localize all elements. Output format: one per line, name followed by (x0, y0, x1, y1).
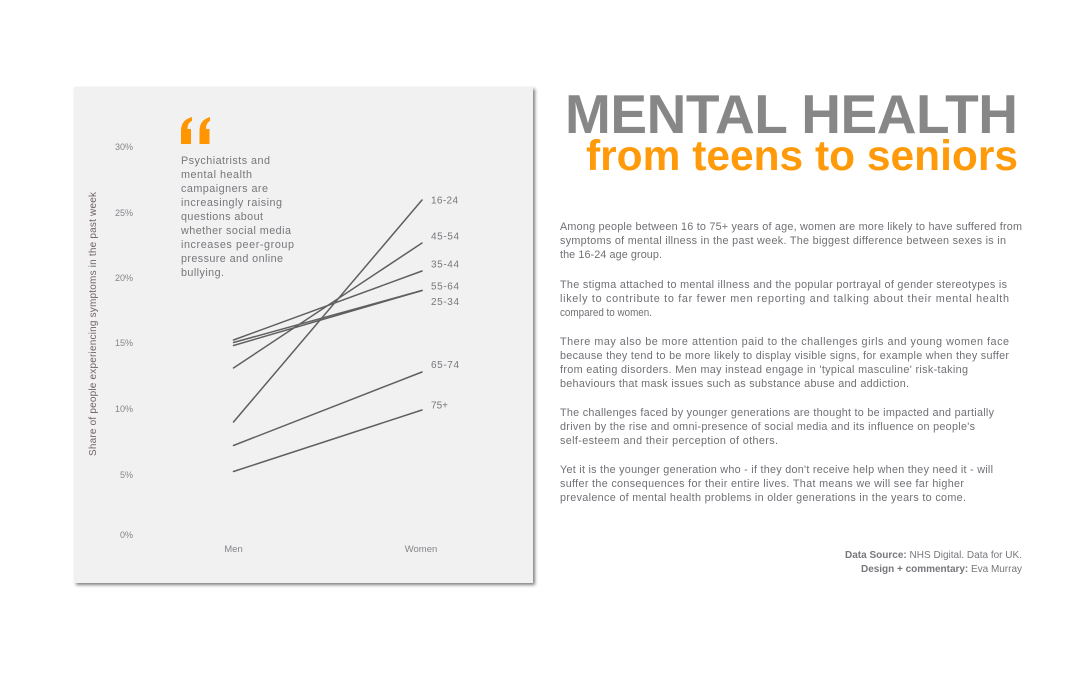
slope chart lines (234, 200, 422, 472)
quote text (180, 155, 294, 279)
y-axis title: Share of people experiencing symptoms in the past week (88, 191, 99, 456)
paragraph 3: from eating disorders. Men may instead engage in 'typical masculine' risk-taking (560, 364, 968, 376)
y-axis labels: 20% (115, 273, 133, 283)
paragraph 3: because they tend to be more likely to display visible signs, for example when they suffer (560, 350, 1009, 362)
y-axis labels: 5% (120, 470, 133, 480)
paragraph 3: behaviours that mask issues such as substance abuse and addiction. (560, 378, 909, 390)
quote text: questions about (181, 211, 263, 223)
age group labels: 45-54 (431, 232, 459, 242)
quote text: pressure and online (181, 253, 283, 265)
y-axis labels: 10% (115, 404, 133, 414)
paragraph 2: compared to women. (560, 307, 652, 319)
paragraph 2: likely to contribute to far fewer men reporting and talking about their mental health (560, 293, 1009, 305)
line: 16-24 (234, 200, 422, 422)
y-axis labels: 25% (115, 208, 133, 218)
age group labels: 25-34 (431, 297, 459, 308)
age group labels: 55-64 (431, 282, 459, 292)
paragraph 1: Among people between 16 to 75+ years of age, women are more likely to have suffered from (560, 221, 1022, 233)
x-axis labels (224, 544, 437, 555)
quote text: bullying. (181, 267, 224, 279)
paragraph 1: the 16-24 age group. (560, 249, 662, 261)
credits (845, 550, 1022, 575)
paragraph 4 (560, 407, 995, 447)
x-axis labels: Men (224, 544, 243, 555)
line: 45-54 (234, 243, 422, 368)
paragraph 4: driven by the rise and omni-presence of social media and its influence on people's (560, 421, 976, 433)
paragraph 2 (560, 279, 1009, 319)
credits: Design + commentary: Eva Murray (861, 564, 1022, 575)
credits: Data Source: NHS Digital. Data for UK. (845, 550, 1022, 561)
x-axis labels: Women (405, 544, 437, 555)
y-axis labels: 0% (120, 530, 133, 540)
line: 25-34 (234, 290, 422, 346)
age group labels: 35-44 (431, 260, 459, 270)
paragraph 2: The stigma attached to mental illness and the popular portrayal of gender stereotypes is (560, 279, 1008, 291)
quote text: campaigners are (181, 183, 268, 195)
subtitle: from teens to seniors (586, 132, 1018, 180)
title: MENTAL HEALTH (565, 83, 1018, 145)
quote text: mental health (181, 169, 252, 181)
quote text: whether social media (180, 225, 291, 237)
paragraph 3 (560, 336, 1009, 390)
icon: quotation mark (181, 117, 210, 144)
y-axis labels: 15% (115, 338, 133, 348)
line: 75+ (234, 410, 422, 472)
paragraph 3: There may also be more attention paid to the challenges girls and young women face (560, 336, 1009, 348)
line: 35-44 (234, 271, 422, 340)
paragraph 5: prevalence of mental health problems in older generations in the years to come. (560, 492, 966, 504)
y-axis labels (115, 142, 133, 540)
paragraph 4: The challenges faced by younger generations are thought to be impacted and partially (560, 407, 995, 419)
commentary text (560, 221, 1022, 504)
paragraph 5: suffer the consequences for their entire lives. That means we will see far higher (560, 478, 964, 490)
panel: chart card (74, 87, 533, 583)
age group labels (431, 196, 459, 412)
paragraph 1: symptoms of mental illness in the past week. The biggest difference between sexes is in (560, 235, 1006, 247)
line: 55-64 (234, 290, 422, 342)
paragraph 4: self-esteem and their perception of others. (560, 435, 778, 447)
quote text: Psychiatrists and (181, 155, 270, 167)
age group labels: 16-24 (431, 196, 458, 206)
age group labels: 75+ (431, 400, 448, 412)
paragraph 5 (560, 464, 993, 504)
quote text: increases peer-group (181, 239, 294, 251)
y-axis labels: 30% (115, 142, 133, 152)
quote text: increasingly raising (181, 197, 282, 209)
paragraph 1 (560, 221, 1022, 261)
age group labels: 65-74 (431, 360, 459, 371)
line: 65-74 (234, 372, 422, 446)
paragraph 5: Yet it is the younger generation who - if they don't receive help when they need it - will (560, 464, 993, 476)
